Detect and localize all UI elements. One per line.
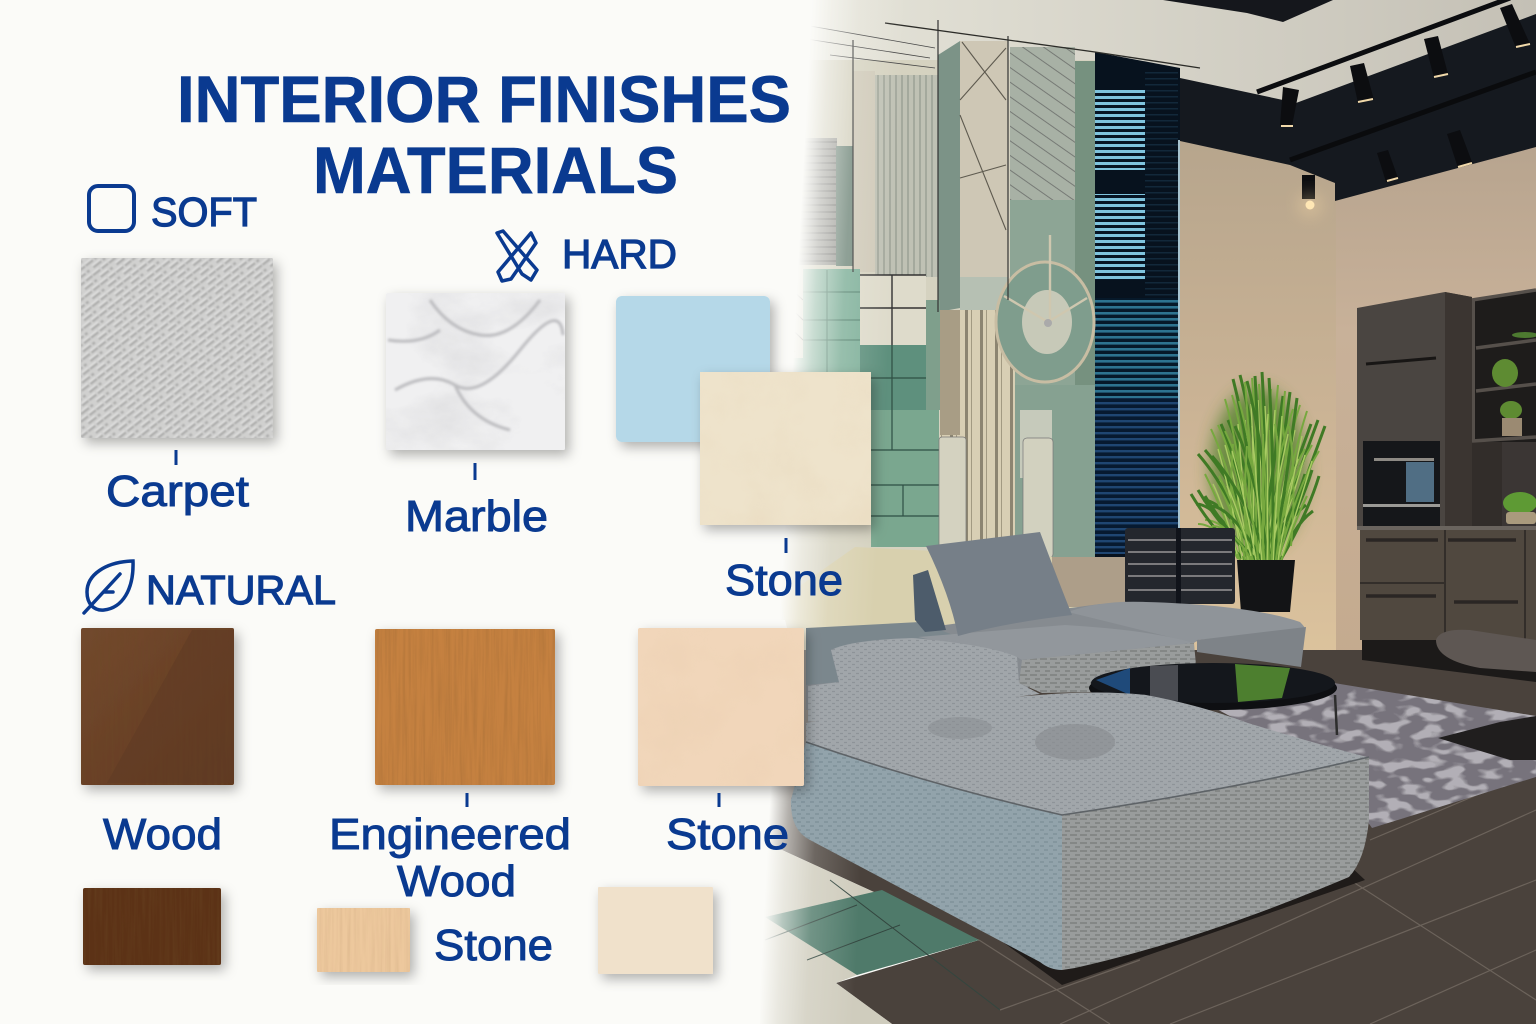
- swatch: dark wood: [83, 888, 221, 965]
- kitchen cabinets: [1357, 290, 1536, 682]
- swatch: marble: Marble: [405, 492, 548, 541]
- label: stone: Stone: [434, 921, 553, 970]
- swatch: wood: Wood: [103, 810, 222, 859]
- section heading: natural: [84, 561, 336, 613]
- seat backing: [806, 604, 1200, 710]
- swatch: stone: Stone: [725, 556, 843, 605]
- lower drawers: [1357, 526, 1536, 682]
- section heading: hard: [497, 231, 677, 281]
- section heading: soft: [89, 186, 257, 235]
- ottoman top: [806, 692, 1367, 815]
- ceiling: [740, 0, 1536, 140]
- fade overlay: [700, 0, 940, 1024]
- title: MATERIALS: [313, 133, 678, 207]
- swatch: stone: [700, 372, 871, 605]
- icon: leaf: [84, 561, 133, 613]
- section heading: hard: HARD: [562, 231, 677, 277]
- window with blinds: [1095, 52, 1180, 560]
- sketch cylinders: [939, 437, 966, 547]
- sketch floor and lower wall: [780, 547, 1127, 680]
- shadow under sofa: [1000, 865, 1365, 985]
- left wall: [1180, 120, 1336, 660]
- rug: [1200, 680, 1536, 830]
- swatch: light wood: [317, 908, 410, 972]
- swatch: cream stone: [598, 887, 713, 974]
- right seat: [1068, 602, 1306, 667]
- ribbed column: [940, 310, 1015, 546]
- oven: [1363, 441, 1440, 527]
- plant pot: [1237, 560, 1295, 612]
- back left section: [806, 622, 953, 685]
- ottoman: [791, 692, 1369, 970]
- section heading: soft: SOFT: [151, 189, 257, 235]
- swatch: natural stone: Stone: [666, 810, 789, 859]
- left seat cushion: [808, 638, 1040, 722]
- sketch wall backdrop: [760, 60, 1100, 620]
- icon: rounded square: [89, 186, 134, 231]
- spotlights: [1280, 4, 1530, 199]
- ceiling beam and track lighting: [1163, 0, 1536, 217]
- glass coffee table: [1089, 663, 1337, 735]
- swatch: carpet: Carpet: [106, 467, 249, 516]
- title: [177, 62, 791, 207]
- lounge chair: [1436, 630, 1536, 760]
- sofa back and seats: [806, 532, 1365, 985]
- floor: [760, 650, 1536, 1024]
- title: INTERIOR FINISHES: [177, 62, 791, 136]
- swatch: carpet: [81, 258, 273, 516]
- swatch: wood: [81, 628, 234, 859]
- wall clock: [996, 235, 1094, 382]
- middle seat: [918, 625, 1196, 693]
- section heading: natural: NATURAL: [146, 567, 336, 613]
- swatch: marble: [386, 293, 565, 541]
- wicker chair: [1125, 528, 1235, 604]
- swatch: engineered wood: Engineered: [329, 810, 571, 859]
- plant: [1191, 372, 1325, 566]
- swatch: engineered wood: [329, 629, 571, 906]
- right wall: [1335, 100, 1536, 680]
- shelving: [1472, 290, 1536, 530]
- cushion behind pillow: [913, 570, 946, 632]
- sketch panels: [767, 20, 1200, 558]
- swatch: natural stone: [638, 628, 804, 859]
- swatch: blue tile: [616, 296, 770, 442]
- swatch: engineered wood: Wood: [397, 857, 516, 906]
- pillow: [926, 532, 1072, 636]
- ottoman right side: [1062, 757, 1369, 970]
- icon: crossed tools: [497, 231, 537, 281]
- ottoman left side: [791, 742, 1062, 970]
